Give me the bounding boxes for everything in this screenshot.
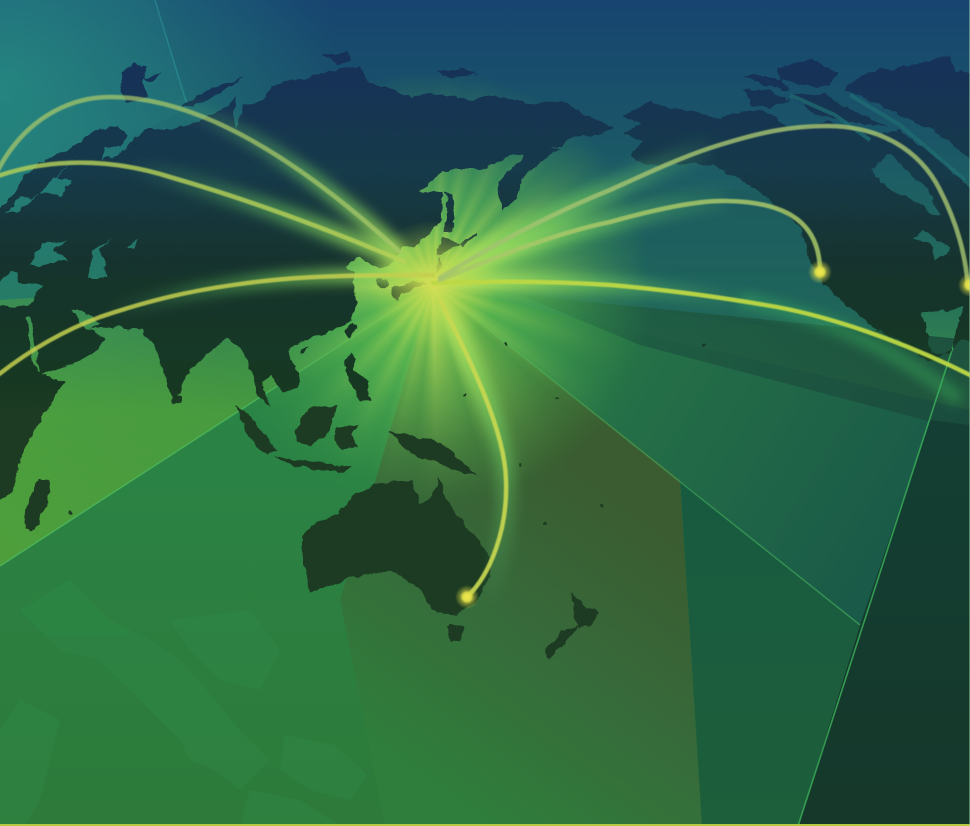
route arcs — [0, 97, 970, 597]
land: Hokkaido — [435, 238, 460, 255]
arc: to north west — [0, 97, 400, 252]
land: Australia — [303, 478, 490, 614]
destination dot: east coast — [958, 273, 970, 297]
wedge: right upper band — [433, 285, 970, 625]
reflected land at the bottom — [0, 580, 368, 826]
wedge: lower left — [0, 285, 433, 826]
land: Tasmania — [447, 626, 464, 641]
arc: to Australia — [440, 300, 506, 597]
destination dot: west coast — [808, 260, 832, 284]
land: Japan main — [392, 282, 428, 301]
land: Philippines — [343, 352, 370, 402]
arc: to east coast — [440, 126, 968, 285]
land: Kamchatka — [497, 148, 560, 210]
wedge: upper left bright green sea — [0, 280, 433, 566]
wedge: lower right teal — [680, 480, 860, 826]
wedge: Pacific shade — [470, 190, 880, 340]
glow: route to west coast — [440, 201, 727, 280]
green trail on the right — [740, 300, 960, 400]
bright line: lower right — [433, 285, 860, 625]
land: Taiwan — [345, 323, 357, 338]
land: New Zealand — [570, 590, 598, 628]
land: Sumatra — [235, 405, 277, 455]
arc: to Europe — [0, 163, 405, 262]
land: New Guinea — [388, 432, 478, 475]
land: small Pacific islands — [68, 344, 707, 526]
bottom edge line — [0, 824, 970, 826]
glow: route to south America — [433, 282, 970, 375]
land masses — [0, 52, 970, 658]
land: North America — [700, 113, 970, 363]
glow: route to Australia — [440, 300, 506, 700]
destination dot: Australia — [455, 585, 479, 609]
land: Java — [273, 457, 350, 472]
land: Greenland — [845, 55, 970, 165]
route glows — [0, 90, 970, 700]
bright line: lower left — [0, 285, 433, 566]
land: Sulawesi — [335, 425, 360, 450]
land: Borneo — [295, 405, 337, 447]
glow: route to west Asia — [100, 275, 433, 317]
strait highlights in the Arctic — [790, 95, 965, 180]
land: Kurils — [460, 233, 478, 246]
wedge: lower middle olive — [340, 285, 702, 826]
land: northern Honshu — [435, 255, 443, 273]
arc: to the Americas south — [433, 282, 970, 376]
land: Alaska — [622, 102, 790, 170]
wedge: right edge dark — [798, 420, 970, 826]
land: Novaya Zemlya — [182, 78, 245, 108]
glow: route to Europe — [0, 145, 405, 262]
arc: to west Asia — [0, 275, 433, 375]
central base glow — [213, 70, 653, 510]
wedge: upper left light shaft — [0, 0, 190, 200]
light burst rays from Japan — [297, 154, 621, 470]
central core glow — [368, 220, 498, 350]
wedge: dark band — [520, 295, 970, 432]
land: Svalbard — [120, 62, 148, 103]
land: Sakhalin — [444, 193, 455, 232]
land: Korea spot — [376, 278, 390, 288]
land: Madagascar — [25, 478, 50, 531]
land: Sri Lanka — [173, 392, 181, 405]
glow: route to east coast — [440, 148, 710, 278]
glow: route to north west — [110, 90, 400, 252]
faint line: top — [155, 0, 187, 105]
land: Canadian Arctic islands — [778, 60, 837, 87]
right edge line — [969, 0, 970, 826]
arc: to west coast — [440, 201, 820, 280]
land: Severnaya Zemlya — [322, 52, 353, 63]
bright line: far right — [798, 310, 965, 826]
land: Eurasia and Africa — [0, 68, 612, 505]
land: Hainan — [300, 346, 308, 353]
